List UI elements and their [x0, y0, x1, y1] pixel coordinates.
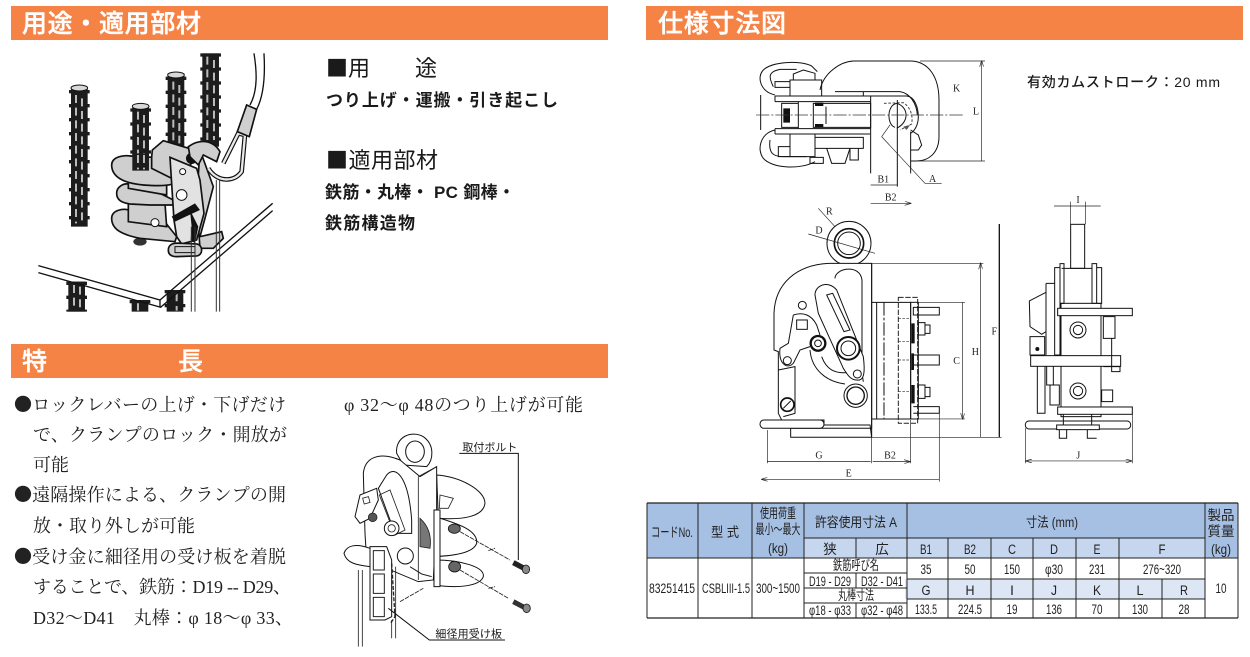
lever	[778, 269, 867, 417]
text block: features list: ●受け金に細径用の受け板を着脱	[14, 543, 286, 569]
table header labels: (kg)	[1211, 542, 1231, 557]
text block: 用途: ■用	[326, 51, 370, 83]
bolts	[448, 524, 530, 613]
table values: 丸棒寸法	[838, 588, 874, 603]
steel plate	[38, 203, 273, 307]
dimensions	[1025, 195, 1132, 463]
clamp body	[363, 456, 437, 582]
table values: 28	[1178, 602, 1190, 617]
table header labels: 製品	[1208, 508, 1234, 523]
table header labels: C	[1008, 542, 1016, 557]
table values: K	[1093, 583, 1101, 598]
text block: features list: ●ロックレバーの上げ・下げだけ	[14, 391, 286, 417]
table values: 224.5	[958, 602, 982, 617]
illustration: clamp with thin-diameter receiving plate	[344, 434, 530, 647]
table header labels: 使用荷重	[760, 505, 796, 521]
table values: 231	[1089, 562, 1105, 577]
heading: 仕様寸法図: 仕様寸法図	[658, 10, 786, 38]
dimensions	[762, 206, 1002, 482]
drawing: side view	[1025, 195, 1132, 463]
dimensions: G	[815, 450, 823, 461]
illustration: clamp lifting rebar	[38, 53, 273, 312]
table values: 276~320	[1143, 562, 1181, 577]
lifting ring	[397, 434, 432, 467]
dimensions: R	[826, 206, 833, 217]
table header labels: D	[1050, 542, 1058, 557]
dimensions: B2	[884, 450, 896, 461]
dimensions: B1	[877, 174, 889, 185]
assembly arrows	[400, 532, 510, 602]
dimensions: K	[953, 83, 961, 94]
text block: features list: 可能	[33, 455, 69, 475]
dimensions: L	[973, 107, 979, 118]
table header labels: 広	[875, 542, 889, 557]
heading: 用途・適用部材	[11, 6, 608, 40]
text block: 用途: つり上げ・運搬・引き起こし	[326, 91, 558, 110]
text block: 適用部材: 鉄筋構造物	[325, 214, 415, 233]
text block: 適用部材: 鉄筋・丸棒・ PC 鋼棒・	[325, 183, 515, 202]
table values: 10	[1216, 581, 1226, 596]
drawing: front view	[760, 206, 1002, 482]
callout: 取付ボルト	[459, 441, 518, 560]
table header labels: コードNo.	[651, 525, 693, 540]
dimensions: E	[846, 469, 852, 480]
spec table	[647, 503, 1238, 618]
dimensions: J	[1076, 450, 1080, 461]
table header labels: F	[1158, 542, 1166, 557]
text block: features list: することで、鉄筋：D19 -- D29、	[33, 577, 291, 597]
receiver stack	[872, 297, 939, 423]
ring	[827, 221, 871, 265]
dimensions: C	[953, 356, 960, 367]
table values: D19 - D29	[809, 574, 851, 589]
text block: 用途	[326, 51, 558, 110]
table values: 133.5	[915, 602, 937, 617]
table values	[649, 557, 1226, 618]
table values: φ30	[1045, 562, 1063, 577]
table header labels: 許容使用寸法 A	[815, 514, 897, 530]
dimensions: A	[929, 174, 937, 185]
table values: D32 - D41	[861, 574, 903, 589]
body	[774, 263, 872, 437]
table header labels: E	[1094, 542, 1100, 557]
callout: 取付ボルト: 取付ボルト	[462, 441, 517, 454]
heading: 用途・適用部材: 用途・適用部材	[22, 10, 201, 38]
heading: 特長: 特	[22, 348, 47, 376]
heading: 仕様寸法図	[646, 6, 1243, 40]
dimensions: B2	[885, 193, 896, 204]
text block: 適用部材: ■適用部材	[326, 143, 438, 175]
table values: J	[1051, 583, 1057, 598]
table values: 鉄筋呼び名	[833, 557, 879, 573]
text: φ32～φ48のつり上げが可能: φ 32～φ 48のつり上げが可能	[344, 395, 583, 415]
table values: 130	[1132, 602, 1148, 617]
table values: R	[1180, 583, 1188, 598]
text block: features list: D32～D41 丸棒：φ 18～φ 33、	[33, 608, 293, 628]
table values: 300~1500	[756, 581, 800, 596]
table values: G	[922, 583, 930, 598]
table values: φ18 - φ33	[809, 603, 851, 618]
table header labels: 寸法 (mm)	[1026, 515, 1078, 530]
text block: 適用部材	[325, 143, 515, 233]
dimensions: H	[972, 347, 979, 358]
outer jaw	[820, 61, 939, 161]
heading: 特長	[11, 344, 608, 378]
table header labels: B2	[964, 542, 976, 557]
rebar bars	[71, 53, 214, 312]
table header labels: 質量	[1208, 524, 1234, 539]
frame plates	[775, 96, 918, 134]
table values: L	[1136, 583, 1144, 598]
dimensions: D	[815, 225, 823, 236]
table header labels: (kg)	[768, 541, 788, 556]
table values: 19	[1006, 602, 1018, 617]
dimensions	[871, 61, 985, 204]
receiver arms	[422, 475, 485, 587]
center line	[756, 114, 963, 116]
dimensions: I	[1076, 195, 1080, 206]
text block: 用途: 途	[415, 56, 437, 81]
heading: 特長: 長	[178, 348, 203, 376]
dimensions: F	[992, 327, 998, 338]
callout: 細径用受け板: 細径用受け板	[435, 626, 502, 640]
sling and wire	[188, 53, 264, 312]
clamp body	[112, 141, 223, 257]
gear teeth	[420, 518, 430, 548]
table values: 83251415	[649, 581, 695, 596]
table values: 35	[920, 562, 932, 577]
text block: features list: で、クランプのロック・開放が	[33, 425, 287, 445]
table header labels: 型 式	[711, 525, 739, 540]
throat	[871, 96, 922, 173]
table values: φ32 - φ48	[861, 603, 903, 618]
table header labels	[651, 505, 1234, 557]
text block: features list: 放・取り外しが可能	[33, 516, 195, 536]
table header fills	[647, 503, 1238, 599]
table header labels: B1	[920, 542, 932, 557]
eye links	[760, 62, 817, 167]
table values: 50	[964, 562, 976, 577]
text block: features list: ●遠隔操作による、クランプの開	[14, 481, 286, 507]
text block: features list	[14, 391, 293, 628]
table values: 70	[1092, 602, 1102, 617]
sling	[344, 546, 370, 567]
table header labels: 狭	[823, 542, 837, 557]
text: effective cam stroke: 有効カムストローク：20 mm	[1027, 74, 1220, 90]
table header labels: 最小～最大	[756, 522, 800, 537]
table values: I	[1010, 583, 1014, 598]
table values: H	[966, 583, 974, 598]
receiving plate	[370, 547, 395, 624]
table values: 150	[1004, 562, 1020, 577]
drawing: top view	[756, 61, 985, 204]
table values: CSBLIII-1.5	[702, 581, 750, 596]
callout: 細径用受け板	[388, 608, 505, 640]
table values: 136	[1046, 602, 1062, 617]
